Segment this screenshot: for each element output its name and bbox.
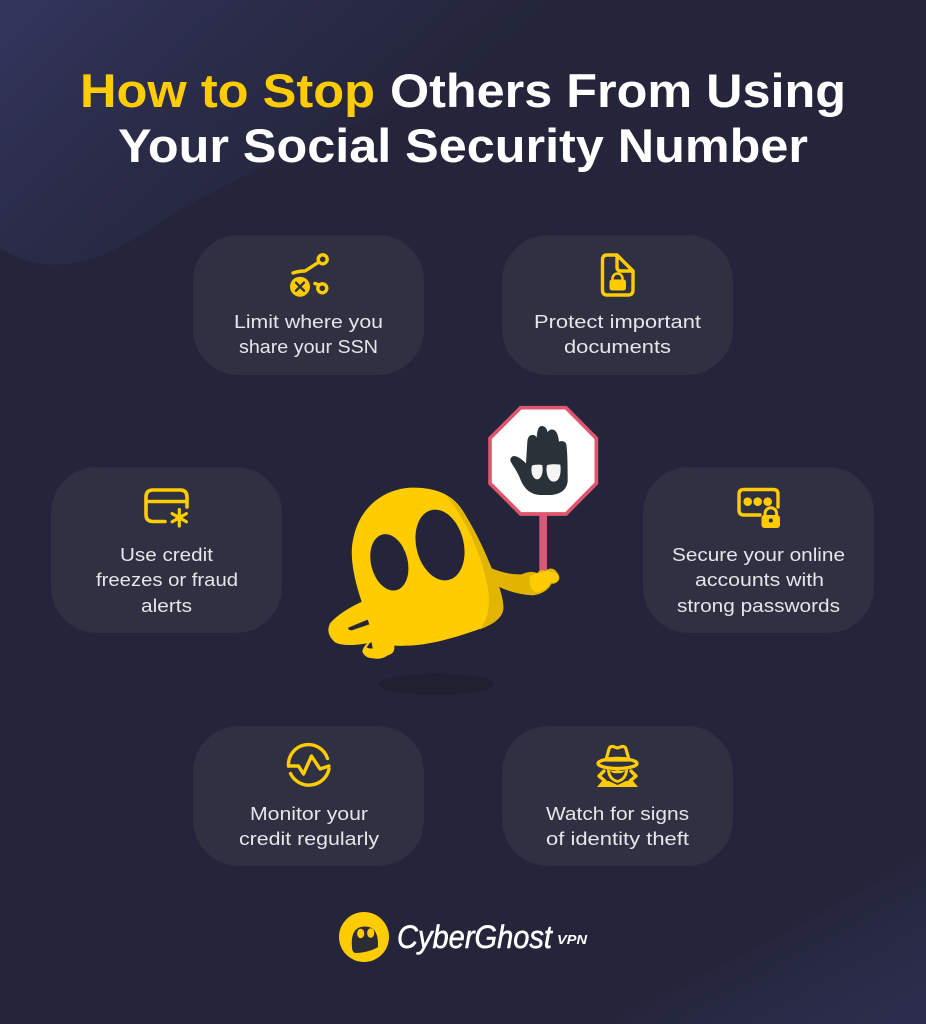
ghost arm and hand xyxy=(490,568,559,595)
logo badge xyxy=(339,912,389,962)
panel: limit where you share your SSN xyxy=(193,235,424,375)
panel: credit freezes or fraud alerts xyxy=(51,467,282,633)
text: secure your online accounts: Secure your online xyxy=(672,545,845,565)
icon: credit pulse circle xyxy=(288,745,329,785)
title: Your Social Security Number xyxy=(118,119,808,172)
body side shade xyxy=(447,496,503,629)
text: monitor your credit regularly: Monitor your xyxy=(250,804,368,824)
text: secure your online accounts: accounts with xyxy=(695,570,824,590)
panel: secure online accounts xyxy=(643,467,874,633)
text: monitor your credit regularly: credit regularly xyxy=(239,829,379,849)
sign pole xyxy=(539,513,547,573)
ground shadow xyxy=(378,674,495,695)
icon: share nodes with cross xyxy=(290,255,327,297)
text: limit where you share your SSN: share your SSN xyxy=(239,337,378,357)
icon: password with lock xyxy=(739,490,780,528)
icon: locked document xyxy=(602,255,633,295)
text: limit where you share your SSN xyxy=(234,312,383,357)
logo VPN tag: VPN xyxy=(557,933,588,947)
logo: CyberGhost VPN xyxy=(339,912,588,962)
text: secure your online accounts: strong passwords xyxy=(677,596,840,616)
ghost body xyxy=(352,488,503,646)
text: use credit freezes or fraud alerts: Use credit xyxy=(120,545,213,565)
title: Others From Using xyxy=(390,64,846,117)
text: watch for signs of identity theft: Watch for signs xyxy=(546,804,689,824)
ghost left arm xyxy=(328,601,382,645)
title xyxy=(80,64,846,172)
illustration: ghost mascot holding stop sign xyxy=(328,408,596,695)
panel: watch for identity theft xyxy=(502,726,733,866)
text: protect important documents: Protect important xyxy=(534,312,701,332)
icon: spy with hat xyxy=(597,746,638,787)
ghost eyes xyxy=(365,530,414,595)
text: use credit freezes or fraud alerts xyxy=(96,545,238,616)
arm gap slit xyxy=(348,620,369,630)
text: secure your online accounts xyxy=(672,545,845,616)
text: limit where you share your SSN: Limit where you xyxy=(234,312,383,332)
text: monitor your credit regularly xyxy=(239,804,379,849)
text: protect important documents: documents xyxy=(564,337,671,357)
title: How to Stop xyxy=(80,64,375,117)
panel: protect important documents xyxy=(502,235,733,375)
text: protect important documents xyxy=(534,312,701,357)
icon: card with snowflake xyxy=(146,490,187,526)
ghost left hand xyxy=(362,638,394,659)
logo wordmark: CyberGhost xyxy=(397,919,553,955)
text: use credit freezes or fraud alerts: freezes or fraud xyxy=(96,570,238,590)
text: use credit freezes or fraud alerts: alerts xyxy=(141,596,192,616)
text: watch for signs of identity theft xyxy=(546,804,689,849)
sign hand xyxy=(510,426,568,495)
text: watch for signs of identity theft: of identity theft xyxy=(546,829,689,849)
stop sign xyxy=(490,408,596,514)
panel: monitor your credit xyxy=(193,726,424,866)
